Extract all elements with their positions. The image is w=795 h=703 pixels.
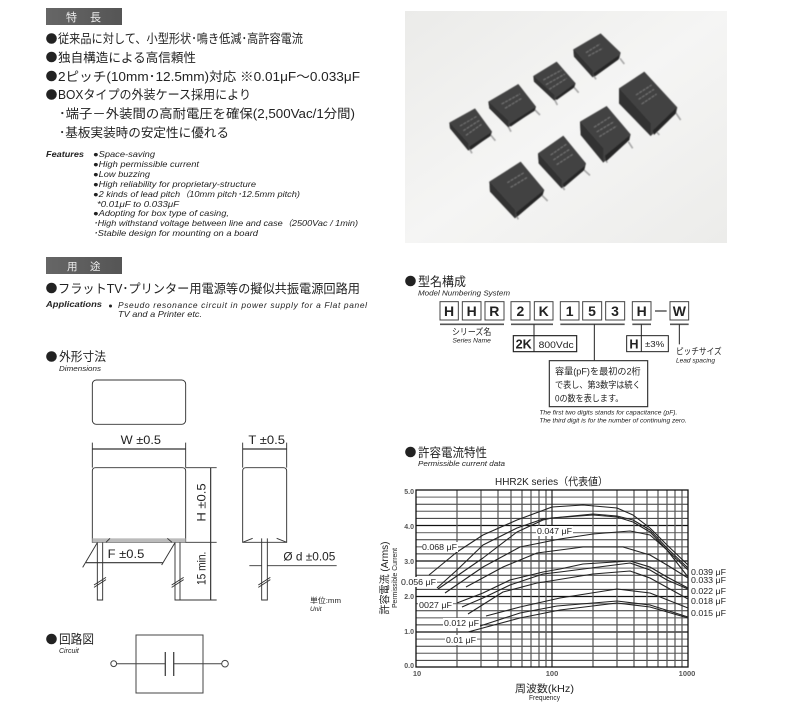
- series name: Series Name: [452, 338, 491, 345]
- x axis title: [515, 682, 574, 702]
- heading: permissible current: [405, 445, 505, 468]
- voltage box: 800Vdc: [539, 340, 574, 350]
- heading: applications bar: 用: [67, 261, 78, 273]
- code boxes: [440, 302, 689, 320]
- left curve labels: 0.068 μF: [422, 543, 457, 552]
- y axis ticks: 0.0: [404, 663, 414, 670]
- top view outline: [92, 380, 186, 424]
- heading: model numbering: [405, 274, 510, 298]
- code letters: 3: [611, 303, 619, 319]
- text block: English features: ●Low buzzing: [93, 169, 150, 179]
- text block: English features: ･Stabile design for mounting on a board: [93, 228, 258, 238]
- right curve labels: 0.015 μF: [691, 609, 726, 618]
- capacitance note box: [549, 361, 648, 407]
- English note: The first two digits stands for capacitance (pF).: [539, 410, 677, 417]
- right curve labels: 0.039 μF: [691, 568, 726, 577]
- y axis ticks: 4.0: [404, 524, 414, 531]
- text block: Japanese features: 従来品に対して、小型形状･鳴き低減･高許容電流: [58, 31, 303, 46]
- y axis title: [378, 542, 399, 614]
- left curve labels: 0.01 μF: [446, 636, 476, 645]
- side view body: [243, 468, 287, 600]
- text block: applications: Applications: [45, 299, 102, 309]
- heading: features bar: 長: [90, 11, 101, 24]
- left curve labels: 0027 μF: [419, 601, 452, 610]
- English note: [539, 410, 687, 425]
- connectors: [440, 322, 689, 327]
- code letters: 1: [566, 303, 574, 319]
- text block: Japanese features: 独自構造による高信頼性: [58, 50, 196, 65]
- text block: English features: *0.01μF to 0.033μF: [97, 199, 180, 209]
- text block: applications: フラットTV･プリンター用電源等の擬似共振電源回路用: [58, 281, 360, 296]
- code letters: W: [673, 303, 687, 319]
- right curve labels: 0.033 μF: [691, 576, 726, 585]
- unit note: 単位:mm: [310, 595, 341, 605]
- right curve labels: [691, 568, 726, 618]
- text block: Japanese features: ･基板実装時の安定性に優れる: [59, 125, 229, 140]
- heading: model numbering: Model Numbering System: [418, 288, 510, 298]
- heading: features bar: [46, 8, 122, 25]
- dimension labels: [108, 434, 335, 585]
- tolerance box: ±3%: [645, 339, 665, 349]
- text block: English features: ●Adopting for box type of casing,: [93, 208, 229, 218]
- y axis title: 許容電流 (Arms): [378, 542, 391, 614]
- bodies: [449, 33, 677, 218]
- lead spacing: Lead spacing: [676, 358, 715, 365]
- code letters: [444, 303, 687, 319]
- code letters: H: [467, 303, 477, 319]
- text block: English features: Features: [46, 149, 84, 159]
- left curve labels: [400, 526, 573, 645]
- code letters: 5: [588, 303, 596, 319]
- code letters: 2: [516, 303, 524, 319]
- darker sides: [449, 49, 651, 218]
- text block: Japanese features: 2ピッチ(10mm･12.5mm)対応 ※0.01μF～0.033μF: [58, 70, 360, 84]
- left curve labels: 0.056 μF: [401, 578, 436, 587]
- heading: features bar: 特: [66, 10, 77, 24]
- heading: circuit: [46, 632, 94, 655]
- code letters: H: [637, 303, 647, 319]
- x axis ticks: 10: [413, 669, 421, 678]
- right curve labels: 0.018 μF: [691, 597, 726, 606]
- text block: English features: ●High reliability for proprietary-structure: [93, 179, 256, 189]
- text block: Japanese features: ･端子－外装間の高耐電圧を確保(2,500Vac/1分間): [59, 106, 355, 121]
- heading: permissible current: Permissible current data: [418, 461, 505, 468]
- heading: model numbering: 型名構成: [418, 274, 466, 289]
- dimension labels: T ±0.5: [248, 434, 285, 447]
- dimension lines: [83, 443, 337, 600]
- tolerance box: H: [629, 338, 639, 352]
- left curve labels: 0.047 μF: [537, 527, 572, 536]
- x axis title: Frequency: [529, 695, 560, 702]
- text block: applications: [45, 281, 368, 319]
- x axis title: 周波数(kHz): [515, 682, 574, 695]
- dimension labels: Ø d ±0.05: [283, 551, 335, 564]
- heading: dimensions: [46, 350, 106, 373]
- text block: Japanese features: BOXタイプの外装ケース採用により: [58, 88, 251, 102]
- printed markings: [460, 44, 657, 187]
- x axis ticks: 100: [546, 669, 558, 678]
- text block: English features: ･High withstand voltage between line and case（2500Vac / 1min): [93, 218, 358, 228]
- y axis ticks: 1.0: [404, 629, 414, 636]
- left curve labels: 0.012 μF: [444, 619, 479, 628]
- voltage box: 2K: [516, 338, 533, 352]
- series name: [452, 326, 491, 345]
- series name: シリーズ名: [452, 326, 491, 337]
- text block: English features: ●2 kinds of lead pitch（10mm pitch･12.5mm pitch): [93, 189, 300, 199]
- text block: applications: TV and a Printer etc.: [118, 309, 202, 319]
- heading: permissible current: 許容電流特性: [418, 445, 487, 460]
- tolerance box: [627, 336, 668, 352]
- capacitance note box: で表し、第3数字は続く: [555, 379, 641, 390]
- right curve labels: 0.022 μF: [691, 587, 726, 596]
- text block: applications: Pseudo resonance circuit in power supply for a Flat panel: [118, 300, 368, 310]
- line chart: permissible current vs frequency: [378, 489, 726, 702]
- code letters: K: [539, 303, 549, 319]
- text block: English features: ●Space-saving: [93, 149, 155, 159]
- dimension labels: W ±0.5: [121, 434, 161, 447]
- text block: English features: [46, 149, 358, 238]
- y axis ticks: 5.0: [404, 489, 414, 496]
- y axis ticks: [404, 489, 414, 670]
- front view body: [92, 468, 186, 600]
- heading: dimensions: 外形寸法: [59, 350, 106, 364]
- circuit diagram: [111, 635, 228, 693]
- dimension labels: H ±0.5: [196, 483, 209, 522]
- x axis ticks: 1000: [679, 669, 695, 678]
- lead spacing: ピッチサイズ: [676, 345, 722, 356]
- lead spacing: [676, 345, 722, 365]
- bottom recess: [469, 55, 676, 217]
- heading: applications bar: 途: [90, 261, 101, 273]
- dimension drawing: [83, 380, 337, 600]
- unit note: [310, 595, 341, 613]
- heading: dimensions: Dimensions: [59, 366, 102, 373]
- dimension labels: 15 min.: [196, 552, 209, 585]
- y axis title: Permissible Current: [392, 548, 399, 608]
- capacitance note box: 容量(pF)を最初の2桁: [555, 365, 641, 376]
- heading: applications bar: [46, 257, 122, 274]
- chart title: HHR2K series（代表値）: [495, 475, 608, 488]
- voltage box: [513, 336, 577, 352]
- model numbering diagram: [440, 302, 722, 425]
- text block: Japanese features: [46, 31, 360, 140]
- x axis ticks: [413, 669, 695, 678]
- y axis ticks: 2.0: [404, 594, 414, 601]
- heading: circuit: Circuit: [59, 648, 80, 655]
- photo: capacitors: [405, 11, 727, 243]
- heading: circuit: 回路図: [59, 632, 94, 646]
- leads: [468, 58, 681, 219]
- grid: [416, 490, 688, 667]
- unit note: Unit: [310, 606, 323, 613]
- capacitance note box: 0の数を表します。: [555, 393, 623, 404]
- dimension labels: F ±0.5: [108, 548, 144, 561]
- English note: The third digit is for the number of continuing zero.: [539, 418, 687, 425]
- curves: [429, 505, 688, 632]
- text block: English features: ●High permissible current: [93, 159, 200, 169]
- code letters: R: [489, 303, 499, 319]
- y axis ticks: 3.0: [404, 559, 414, 566]
- code letters: H: [444, 303, 454, 319]
